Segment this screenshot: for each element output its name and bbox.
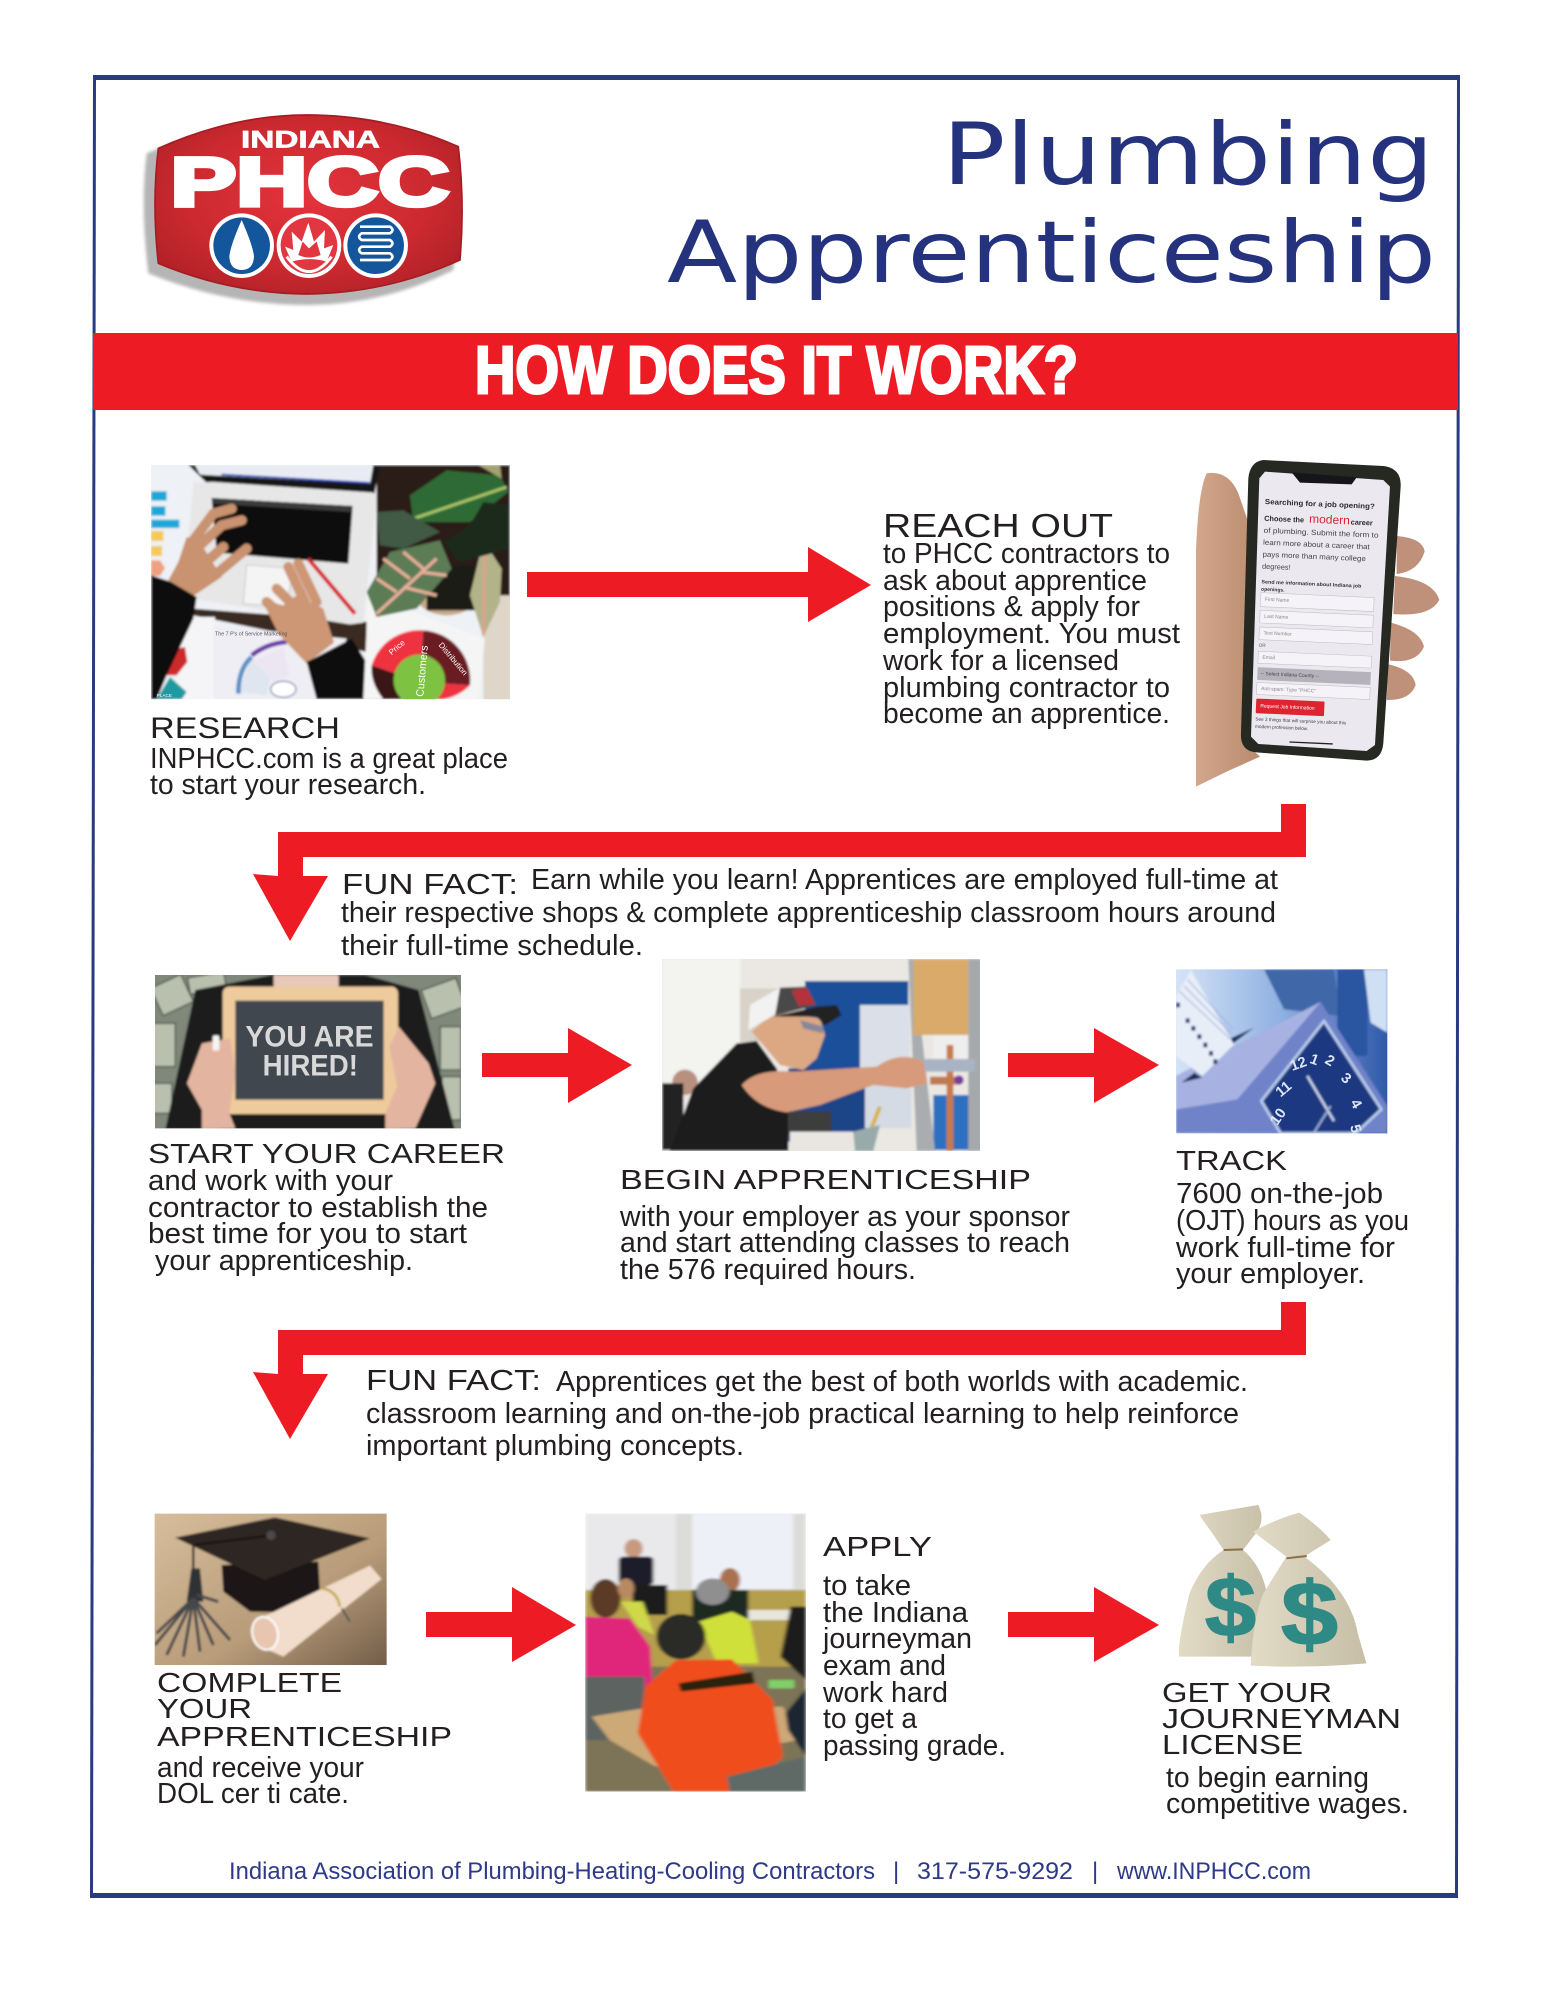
photo: plumber working on pipes xyxy=(660,955,982,1155)
photo: hand holding phone: of plumbing. Submit the form to xyxy=(1263,526,1379,540)
text: begin apprenticeship body xyxy=(619,1201,1070,1286)
footer: contact line: | xyxy=(1092,1858,1098,1885)
step: research xyxy=(150,462,512,801)
photo: hand holding phone: Choose the xyxy=(1264,514,1304,524)
logo: Indiana PHCC: INDIANA xyxy=(241,126,380,153)
text: apply body: exam and xyxy=(823,1650,946,1682)
photo: hand holding phone: pays more than many college xyxy=(1262,550,1366,563)
heading: complete your apprenticeship xyxy=(157,1667,452,1752)
text: complete body: DOL cer ti cate. xyxy=(157,1778,349,1810)
heading: apply: APPLY xyxy=(823,1531,932,1562)
photo: laptop and plant on desk: Customers xyxy=(414,645,431,697)
photo: hand holding phone: Request Job Information xyxy=(1260,703,1315,712)
logo: Indiana PHCC xyxy=(144,115,462,305)
text: track body: your employer. xyxy=(1176,1258,1365,1290)
bent arrow: to start your career xyxy=(253,804,1306,941)
photo: hand holding phone: Last Name xyxy=(1264,614,1289,621)
arrow: begin apprenticeship to track xyxy=(1008,1028,1159,1103)
title xyxy=(667,105,1436,303)
text: reach out body: become an apprentice. xyxy=(883,698,1170,730)
photo: you are hired chalkboard: YOU ARE xyxy=(245,1021,374,1054)
heading: research: RESEARCH xyxy=(150,712,340,745)
fun fact 1: FUN FACT: xyxy=(342,869,518,901)
photo: hand holding phone: -- Select Indiana County -- xyxy=(1261,671,1319,680)
heading: get your journeyman license xyxy=(1162,1677,1401,1760)
text: start your career body: and work with your xyxy=(148,1165,393,1197)
text: start your career body: contractor to establish the xyxy=(148,1192,488,1224)
photo: laptop and plant on desk: The 7 P's of Service Marketing xyxy=(215,631,287,637)
title: Plumbing xyxy=(942,105,1434,205)
text: apply body: journeyman xyxy=(822,1623,972,1655)
text: research body xyxy=(150,743,508,801)
heading: begin apprenticeship: BEGIN APPRENTICESHIP xyxy=(620,1164,1031,1195)
step: get your journeyman license xyxy=(1162,1505,1409,1820)
photo: blue time clock xyxy=(1174,966,1390,1136)
photo: blue time clock: 1 xyxy=(1308,1051,1321,1069)
text: license body: competitive wages. xyxy=(1166,1788,1409,1820)
step: reach out xyxy=(882,460,1439,787)
text: start your career body xyxy=(148,1165,488,1277)
icon: money bags: $ xyxy=(1281,1565,1338,1665)
arrow: complete to apply xyxy=(426,1587,576,1662)
photo: laptop and plant on desk: Price xyxy=(387,638,407,657)
photo: hand holding phone: OR xyxy=(1259,643,1266,648)
text: reach out body xyxy=(882,538,1180,730)
text: research body: to start your research. xyxy=(150,769,426,801)
photo: hand holding phone: Send me information about Indiana job xyxy=(1261,579,1361,590)
text: begin apprenticeship body: the 576 required hours. xyxy=(620,1254,916,1286)
text: license body xyxy=(1166,1762,1409,1820)
footer: contact line: Indiana Association of Plumbing-Heating-Cooling Contractors xyxy=(229,1858,875,1885)
photo: classroom with apprentices xyxy=(585,1513,806,1792)
step: track xyxy=(1174,966,1409,1290)
arrow: research to reach out xyxy=(527,547,871,622)
icon: money bags xyxy=(1179,1505,1366,1667)
arrow: start career to begin apprenticeship xyxy=(482,1028,632,1103)
photo: hand holding phone: Text Number xyxy=(1263,630,1292,638)
icon: water drop xyxy=(209,213,274,278)
footer: contact line: | xyxy=(893,1858,899,1885)
icon: radiant coil xyxy=(343,213,408,278)
photo: blue time clock: 4 xyxy=(1347,1097,1365,1112)
photo: hand holding phone: openings. xyxy=(1261,587,1285,594)
photo: blue time clock: 12 xyxy=(1288,1054,1309,1075)
photo: laptop and plant on desk: Distribution xyxy=(437,641,469,677)
text: start your career body: best time for you to start xyxy=(148,1218,467,1250)
step: complete your apprenticeship xyxy=(150,1505,452,1810)
footer: contact line: www.INPHCC.com xyxy=(1116,1858,1311,1885)
photo: hand holding phone xyxy=(1196,460,1439,787)
heading: get your journeyman license: GET YOUR xyxy=(1162,1677,1332,1708)
fun fact 1: Earn while you learn! Apprentices are employed full-time at xyxy=(531,864,1278,896)
heading: complete your apprenticeship: APPRENTICESHIP xyxy=(157,1721,452,1752)
logo: Indiana PHCC: PHCC xyxy=(171,144,449,220)
text: reach out body: positions & apply for xyxy=(883,591,1140,623)
text: apply body: work hard xyxy=(822,1677,948,1709)
photo: blue time clock: 5 xyxy=(1346,1123,1364,1135)
photo: laptop and plant on desk: PLACE xyxy=(157,693,172,698)
fun fact 2: classroom learning and on-the-job practical learning to help reinforce xyxy=(366,1398,1239,1430)
fun fact 2 xyxy=(366,1365,1248,1462)
photo: hand holding phone: learn more about a career that xyxy=(1263,538,1370,551)
photo: blue time clock: 3 xyxy=(1337,1070,1354,1088)
heading: complete your apprenticeship: COMPLETE xyxy=(157,1667,342,1698)
step: begin apprenticeship xyxy=(619,955,1070,1286)
step: apply xyxy=(585,1513,1006,1792)
title: Apprenticeship xyxy=(667,203,1436,303)
photo: hand holding phone: modern profession below. xyxy=(1255,724,1308,731)
text: apply body: to get a xyxy=(823,1703,918,1735)
text: reach out body: work for a licensed xyxy=(882,645,1119,677)
text: apply body: passing grade. xyxy=(823,1730,1006,1762)
text: begin apprenticeship body: and start attending classes to reach xyxy=(620,1227,1070,1259)
text: apply body: the Indiana xyxy=(823,1597,969,1629)
fun fact 2: FUN FACT: xyxy=(366,1365,541,1397)
fun fact 2: Apprentices get the best of both worlds with academic. xyxy=(556,1366,1248,1398)
banner: how does it work: HOW DOES IT WORK? xyxy=(475,333,1078,408)
text: research body: INPHCC.com is a great place xyxy=(150,743,508,775)
heading: start your career: START YOUR CAREER xyxy=(148,1138,505,1169)
step: start your career xyxy=(148,970,505,1277)
text: start your career body: your apprenticeship. xyxy=(155,1245,413,1277)
text: reach out body: employment. You must xyxy=(883,618,1180,650)
text: track body: (OJT) hours as you xyxy=(1176,1205,1409,1237)
heading: track: TRACK xyxy=(1176,1145,1287,1176)
photo: hand holding phone: modern xyxy=(1309,512,1350,527)
photo: hand holding phone: See 3 things that will surprise you about this xyxy=(1255,717,1347,725)
text: apply body xyxy=(822,1570,1006,1762)
photo: hand holding phone: First Name xyxy=(1265,597,1290,604)
fun fact 1: their full-time schedule. xyxy=(341,930,643,962)
photo: blue time clock: 2 xyxy=(1322,1052,1337,1070)
fun fact 1: their respective shops & complete apprenticeship classroom hours around xyxy=(341,897,1276,929)
photo: hand holding phone: Searching for a job opening? xyxy=(1265,497,1376,511)
icon: money bags: $ xyxy=(1205,1560,1256,1654)
text: complete body xyxy=(157,1752,364,1810)
footer: contact line: 317-575-9292 xyxy=(917,1858,1073,1885)
photo: you are hired chalkboard: HIRED! xyxy=(263,1049,358,1082)
text: track body xyxy=(1175,1178,1409,1290)
photo: hand holding phone: career xyxy=(1351,517,1373,527)
text: reach out body: plumbing contractor to xyxy=(883,672,1170,704)
text: reach out body: ask about apprentice xyxy=(883,565,1147,597)
heading: reach out: REACH OUT xyxy=(883,507,1113,544)
photo: hand holding phone: Email xyxy=(1262,655,1275,661)
heading: get your journeyman license: LICENSE xyxy=(1162,1729,1303,1760)
photo: you are hired chalkboard xyxy=(151,970,466,1132)
banner: how does it work xyxy=(93,333,1458,410)
text: track body: 7600 on-the-job xyxy=(1176,1178,1383,1210)
arrow: apply to license xyxy=(1008,1587,1159,1662)
bent arrow: to complete apprenticeship xyxy=(253,1302,1306,1439)
text: reach out body: to PHCC contractors to xyxy=(883,538,1170,570)
photo: blue time clock: 10 xyxy=(1267,1106,1290,1128)
text: complete body: and receive your xyxy=(157,1752,364,1784)
heading: complete your apprenticeship: YOUR xyxy=(157,1693,252,1724)
text: license body: to begin earning xyxy=(1166,1762,1369,1794)
fun fact 1 xyxy=(341,864,1278,962)
fun fact 2: important plumbing concepts. xyxy=(366,1430,744,1462)
heading: get your journeyman license: JOURNEYMAN xyxy=(1162,1703,1401,1734)
photo: laptop and plant on desk xyxy=(150,462,512,706)
text: track body: work full-time for xyxy=(1175,1232,1395,1264)
photo: graduation cap and diploma xyxy=(154,1514,387,1665)
text: apply body: to take xyxy=(823,1570,911,1602)
icon: flame xyxy=(277,213,341,278)
footer: contact line xyxy=(229,1858,1311,1885)
text: begin apprenticeship body: with your employer as your sponsor xyxy=(619,1201,1070,1233)
photo: hand holding phone: degrees! xyxy=(1262,562,1291,572)
photo: hand holding phone: Anti-spam: Type "PHCC" xyxy=(1261,686,1316,694)
photo: blue time clock: 11 xyxy=(1273,1078,1295,1101)
